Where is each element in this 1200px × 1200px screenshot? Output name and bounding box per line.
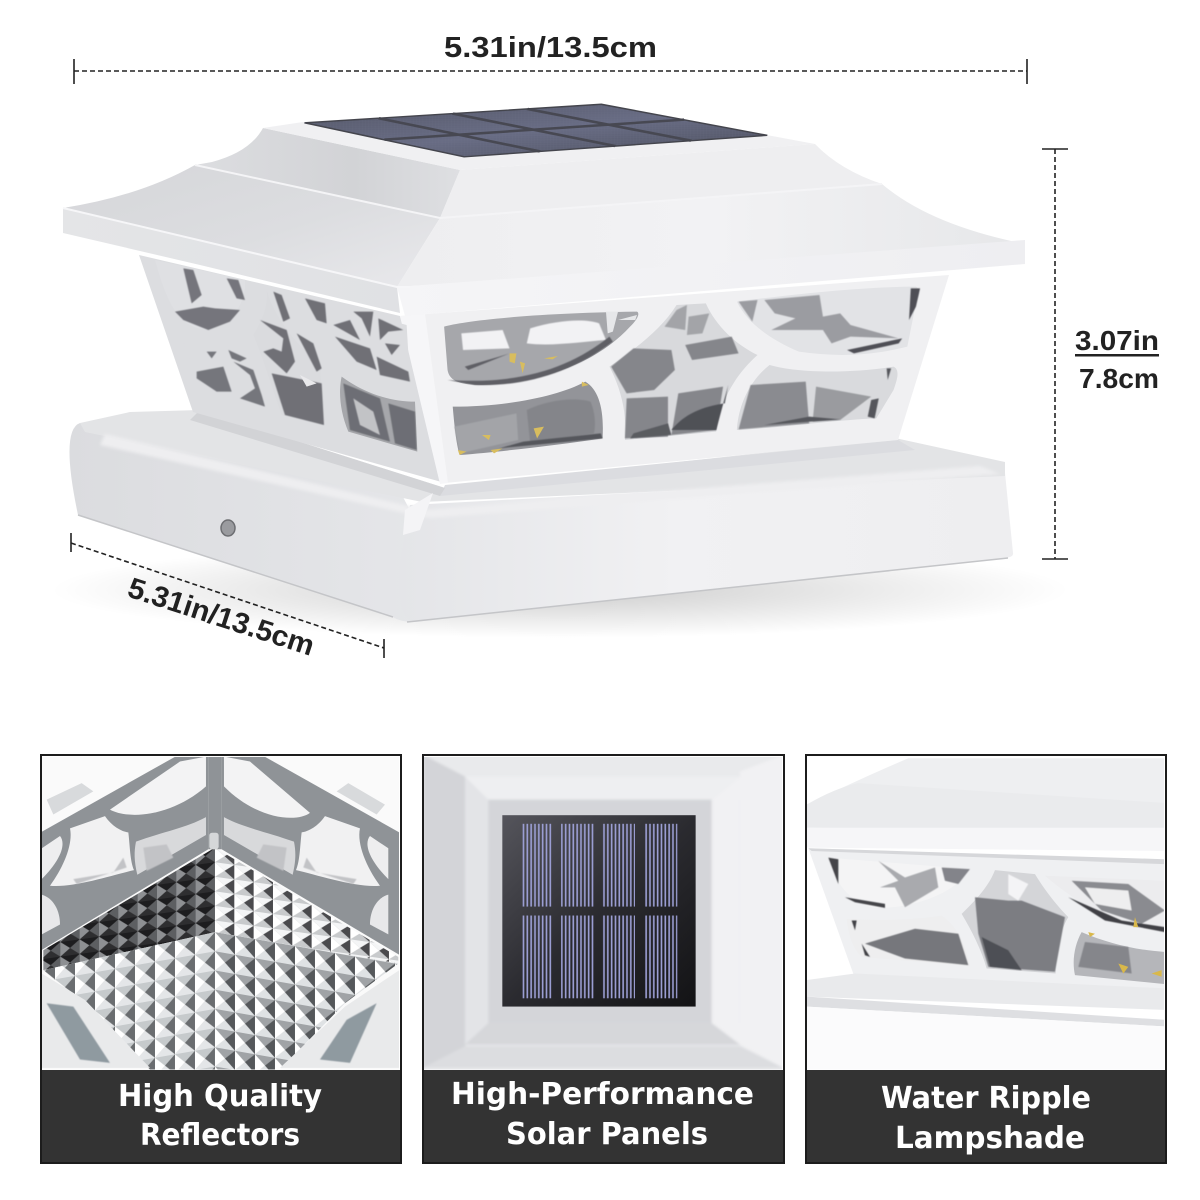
lantern body bbox=[139, 255, 949, 484]
panel: reflectors bbox=[40, 755, 402, 1163]
lampshade image bbox=[807, 758, 1164, 1026]
reflector caption bbox=[118, 1079, 322, 1153]
solar caption: Solar Panels bbox=[506, 1117, 708, 1152]
ground shadow bbox=[50, 542, 1070, 638]
window L1 bbox=[155, 260, 245, 330]
lampshade caption: Lampshade bbox=[895, 1121, 1085, 1156]
lampshade windows bbox=[828, 858, 1165, 984]
top width line bbox=[74, 70, 1027, 72]
depth label: 5.31in/13.5cm bbox=[124, 572, 318, 663]
top width label: 5.31in/13.5cm bbox=[444, 32, 657, 64]
reflector caption: High Quality bbox=[118, 1079, 322, 1114]
product: solar post cap light bbox=[50, 104, 1070, 638]
dimension: height bbox=[1042, 149, 1159, 559]
solar caption bar bbox=[423, 1070, 784, 1163]
lampshade caption: Water Ripple bbox=[881, 1081, 1091, 1116]
lampshade base bbox=[807, 973, 1165, 1010]
solar cell array bbox=[502, 815, 696, 1007]
height label bbox=[1075, 325, 1159, 394]
lampshade frame bbox=[806, 755, 1166, 1163]
dimension: depth bbox=[71, 533, 384, 663]
depth line bbox=[71, 543, 384, 648]
panel: solar panels bbox=[422, 755, 785, 1163]
window L2 bbox=[183, 343, 265, 408]
windows: right face bbox=[444, 287, 920, 455]
roof collar bbox=[195, 128, 460, 218]
solar panel bbox=[305, 104, 767, 157]
reflector image bbox=[40, 755, 402, 1069]
solar caption: High-Performance bbox=[451, 1077, 754, 1112]
height label: 3.07in bbox=[1075, 325, 1159, 356]
windows: left face bbox=[155, 260, 417, 452]
solar frame bbox=[423, 755, 784, 1163]
window L3 bbox=[253, 290, 324, 425]
reflector caption: Reflectors bbox=[140, 1118, 300, 1153]
window center bbox=[609, 303, 758, 440]
lampshade caption bbox=[881, 1081, 1091, 1156]
depth ticks bbox=[71, 533, 384, 658]
roof bbox=[63, 104, 1025, 316]
center post bbox=[208, 755, 222, 849]
dark upper reflector bbox=[43, 848, 215, 970]
solar caption bbox=[451, 1077, 754, 1152]
reflector frame bbox=[41, 755, 401, 1163]
solar image bbox=[422, 755, 785, 1069]
lower frame bbox=[42, 973, 150, 1068]
window bottom-right bbox=[737, 365, 898, 430]
lantern frame left bbox=[40, 755, 208, 951]
window bottom-left bbox=[453, 382, 603, 455]
panel: lampshade bbox=[805, 755, 1167, 1163]
dimension: top width bbox=[74, 32, 1027, 84]
lower reflector bbox=[43, 932, 215, 1069]
lampshade caption bar bbox=[806, 1070, 1166, 1163]
window L5 bbox=[340, 377, 417, 452]
height label: 7.8cm bbox=[1079, 363, 1159, 394]
frame tabs bbox=[47, 783, 385, 815]
reflector caption bar bbox=[41, 1070, 401, 1163]
window top-left bbox=[444, 312, 638, 385]
window L4 bbox=[303, 298, 410, 382]
top width ticks bbox=[74, 59, 1027, 84]
window top-right bbox=[737, 287, 920, 355]
height line bbox=[1054, 149, 1056, 559]
lantern frame right bbox=[222, 755, 400, 955]
height ticks bbox=[1042, 149, 1068, 559]
screw bbox=[221, 520, 235, 536]
base bbox=[69, 410, 1013, 622]
